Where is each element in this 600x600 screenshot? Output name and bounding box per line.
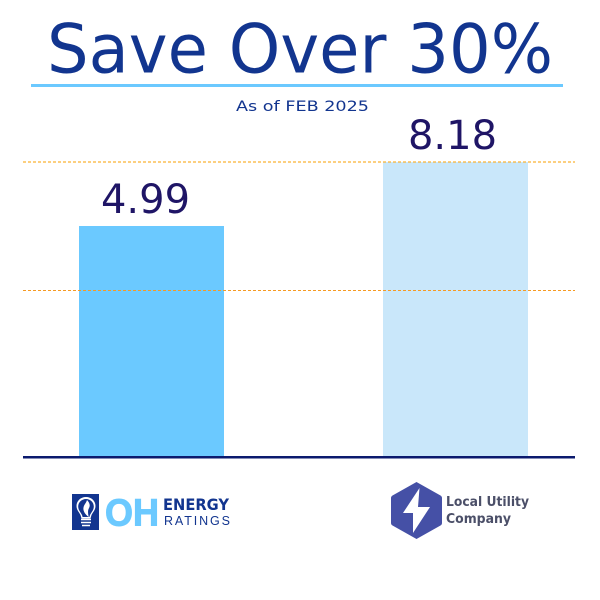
title: Save Over 30% [47, 10, 553, 90]
logo text Company: Company [446, 512, 512, 527]
value: 8.18: 8.18 [408, 113, 497, 159]
logo text Local Utility: Local Utility [446, 495, 529, 510]
bar: Local Utility Company [383, 162, 528, 457]
bar: OH Energy Ratings [79, 226, 224, 457]
logo wordmark RATINGS: RATINGS [164, 514, 230, 528]
baseline axis [23, 456, 575, 458]
logo wordmark ENERGY: ENERGY [163, 495, 229, 514]
value: 4.99: 4.99 [101, 177, 190, 223]
logo: Local Utility Company [391, 482, 529, 539]
icon: light bulb [72, 494, 99, 530]
bar chart [23, 113, 575, 458]
logo wordmark OH: OH [105, 492, 159, 534]
subtitle date: As of FEB 2025 [236, 99, 369, 115]
logo: OH Energy Ratings [72, 492, 230, 534]
icon: hexagon lightning bolt [391, 482, 442, 539]
title underline [31, 84, 563, 87]
